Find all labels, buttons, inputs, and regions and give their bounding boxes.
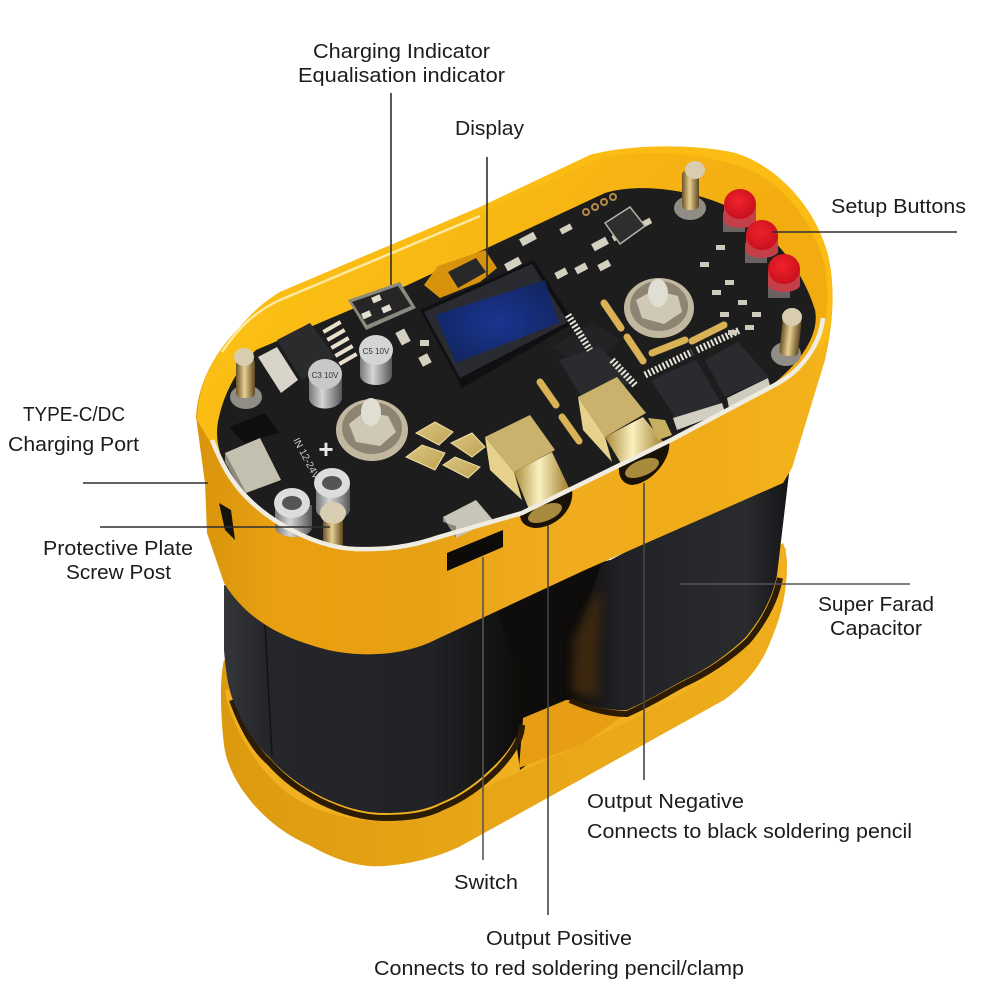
label: charging indicator: [298, 41, 505, 87]
output negative gold connector: [578, 377, 672, 470]
label: charging port: [8, 404, 139, 456]
tray floor between capacitors: [519, 700, 628, 768]
capacitor gap: [495, 560, 610, 770]
switch opening: [447, 530, 503, 571]
label: display: Display: [455, 118, 524, 140]
housing inner wall: [198, 153, 827, 549]
polarity mark and input text: IN 12-24V: [290, 436, 321, 481]
electrolytic capacitors lower left: [274, 468, 350, 537]
polarity mark and input text: +: [318, 434, 334, 464]
label: switch: Switch: [454, 872, 518, 894]
label: output positive: Connects to red soldering pencil/clamp: [374, 958, 744, 980]
output positive port opening: [520, 489, 572, 528]
capacitor contact shadow: [232, 578, 780, 818]
smd parts near buttons: [700, 245, 761, 335]
label: output negative: Output Negative: [587, 791, 744, 813]
left screw post: [230, 348, 262, 409]
electrolytic capacitor C3: C3 10V: [312, 371, 339, 380]
label: charging port: TYPE-C/DC: [23, 404, 125, 426]
front screw post: [320, 502, 346, 547]
top right screw post: [674, 161, 706, 220]
output positive gold connector: [485, 415, 570, 512]
smd resistor row: [322, 320, 358, 366]
power transistor: [258, 323, 335, 393]
gold bus bars: [540, 303, 724, 441]
mosfet leads: [568, 315, 740, 385]
electrolytic capacitor C5: C5 10V: [363, 347, 390, 356]
left terminal bolt: [336, 398, 408, 461]
gold via pads: [583, 194, 616, 215]
label: charging indicator: Equalisation indicator: [298, 65, 505, 87]
silver inductor block: [225, 413, 281, 500]
label: super farad capacitor: Capacitor: [830, 618, 922, 640]
red setup buttons: [723, 189, 800, 298]
acrylic plate front edge: [212, 318, 823, 549]
right screw post: [771, 308, 802, 366]
small silver component: [443, 500, 493, 538]
type-c port slot: [219, 503, 235, 540]
electrolytic capacitor C5: [359, 335, 393, 385]
label: output positive: [374, 928, 744, 980]
label: output negative: Connects to black soldering pencil: [587, 821, 912, 843]
top housing band: [196, 146, 833, 654]
label: charging port: Charging Port: [8, 434, 139, 456]
orange tape under display: [424, 250, 497, 298]
left capacitor wrap seam: [265, 625, 272, 755]
circuit board: [217, 188, 816, 549]
led indicator block: [348, 282, 416, 330]
left super capacitor: [224, 585, 519, 813]
label: setup buttons: Setup Buttons: [831, 196, 966, 218]
polarity mark and input text: [290, 434, 334, 481]
electrolytic capacitor C3: [308, 359, 342, 408]
small smd parts around top: [395, 218, 652, 367]
mosfets: [551, 323, 770, 430]
output negative port opening: [619, 441, 669, 485]
brown reflection on right capacitor: [572, 590, 602, 698]
gold contact pads: [406, 422, 485, 478]
leader lines: [83, 93, 957, 915]
right terminal bolt: [624, 278, 694, 338]
oled display: [420, 260, 574, 388]
label: charging indicator: Charging Indicator: [313, 41, 490, 63]
label: output negative: [587, 791, 912, 843]
label: protective plate screw post: [43, 538, 193, 584]
bottom tray: [221, 543, 787, 866]
pale back edge of acrylic plate: [222, 216, 480, 352]
housing rim highlight: [197, 146, 832, 552]
label: protective plate screw post: Screw Post: [66, 562, 171, 584]
label: super farad capacitor: Super Farad: [818, 594, 934, 616]
label: protective plate screw post: Protective Plate: [43, 538, 193, 560]
label: output positive: Output Positive: [486, 928, 632, 950]
label: super farad capacitor: [818, 594, 934, 640]
right super capacitor: [566, 465, 790, 710]
ic chip: [605, 207, 645, 244]
